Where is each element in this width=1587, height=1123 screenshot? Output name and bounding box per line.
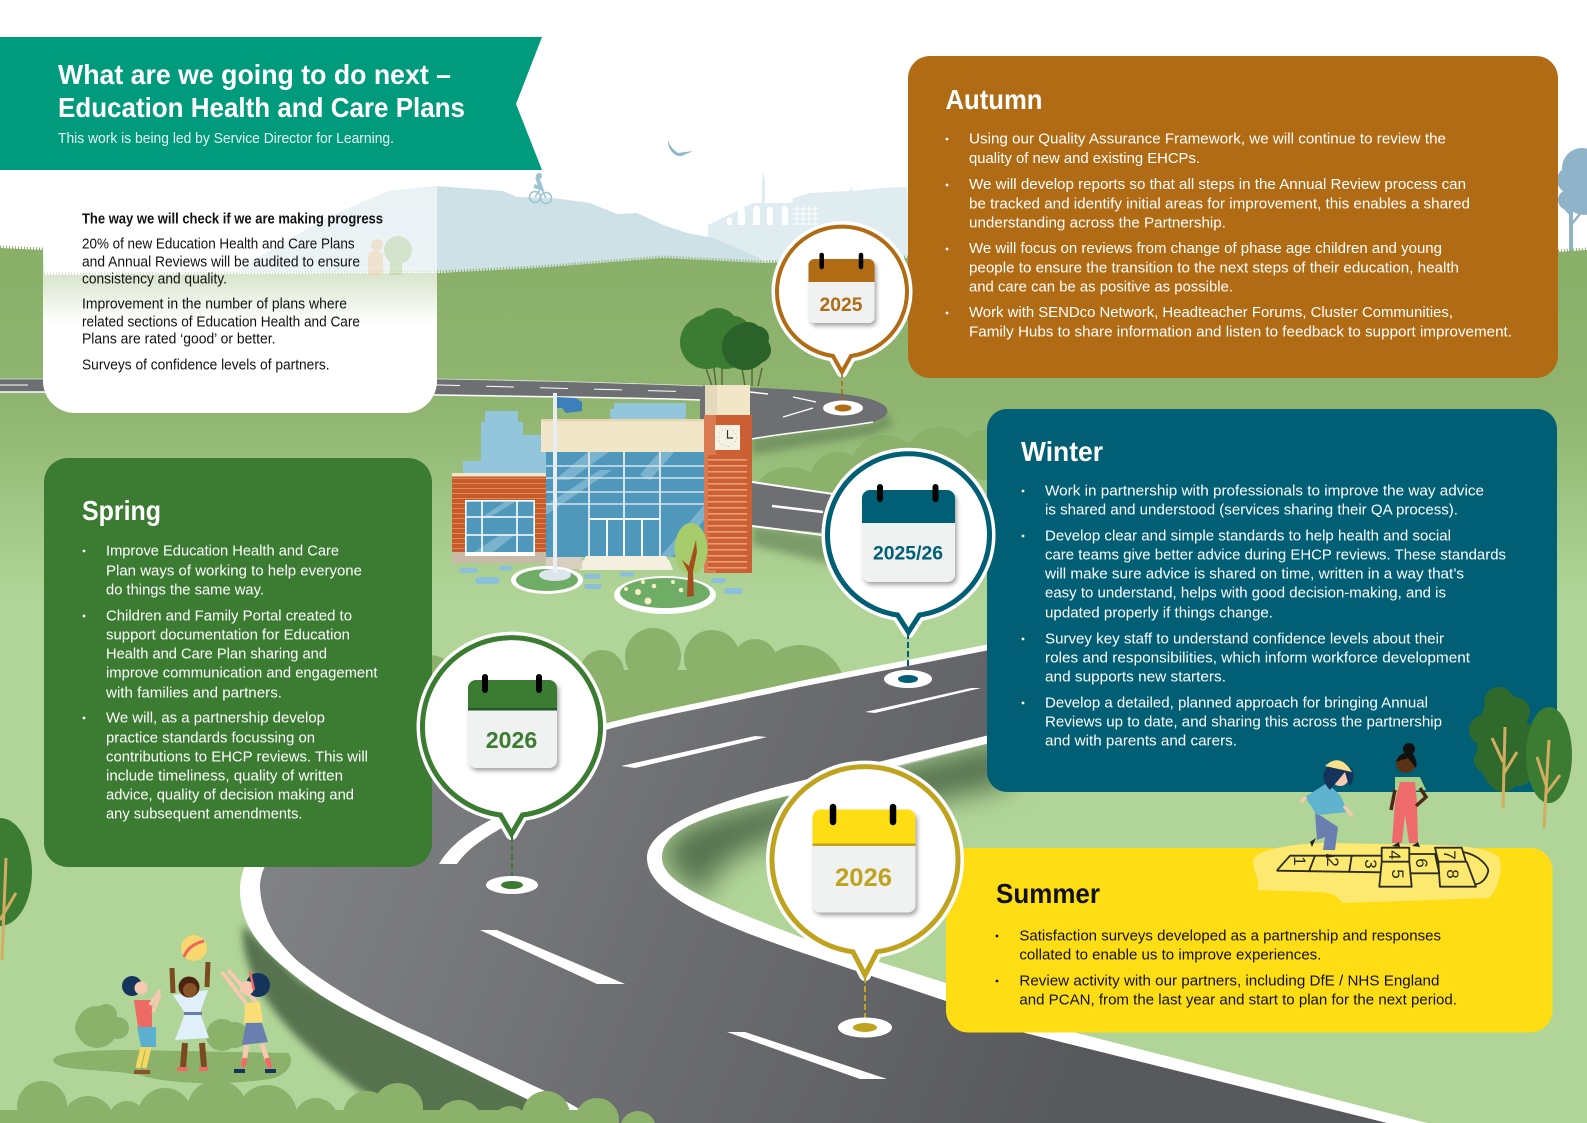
title banner — [0, 37, 542, 170]
list: Work with SENDco Network, Headteacher Forums, Cluster Communities, — [969, 305, 1453, 321]
calendar: 2025/26 — [873, 544, 943, 564]
road — [240, 640, 1450, 1123]
children: hopscotch — [1301, 743, 1426, 858]
measures: consistency and quality. — [82, 272, 227, 288]
heading: Winter — [1021, 436, 1103, 467]
ground — [53, 1050, 291, 1083]
pin: 2025 — [777, 227, 907, 416]
pin: 2026 spring — [423, 638, 601, 894]
tree left — [0, 818, 32, 960]
list: Reviews up to date, and sharing this across the partnership — [1045, 714, 1442, 730]
list — [969, 132, 1512, 340]
list: Improve Education Health and Care — [106, 544, 339, 560]
road shadow — [243, 925, 600, 1123]
list: improve communication and engagement — [106, 666, 378, 682]
clock — [715, 425, 740, 450]
list: Develop a detailed, planned approach for bringing Annual — [1045, 696, 1428, 712]
flower beds — [511, 566, 716, 614]
title banner: Education Health and Care Plans — [58, 92, 465, 123]
list: understanding across the Partnership. — [969, 216, 1226, 232]
ball — [181, 935, 207, 961]
trees right — [1469, 687, 1572, 828]
steps — [579, 556, 673, 570]
calendar — [468, 677, 557, 768]
calendar: 2026 — [835, 864, 892, 892]
list: updated properly if things change. — [1045, 606, 1273, 622]
calendar: 2025 — [820, 295, 863, 316]
panel: autumn — [908, 56, 1558, 378]
list: Review activity with our partners, including DfE / NHS England — [1019, 974, 1439, 990]
list: do things the same way. — [106, 582, 264, 598]
icon: bird — [668, 140, 693, 156]
bullets — [946, 138, 948, 314]
hopscotch numbers: 5 — [1388, 869, 1407, 879]
list: and care can be as positive as possible. — [969, 280, 1233, 296]
icon: cyclist — [530, 174, 552, 204]
list: support documentation for Education — [106, 628, 350, 644]
hopscotch numbers: 6 — [1412, 858, 1431, 868]
distant hills and skyline — [240, 172, 915, 272]
clock tower — [704, 385, 752, 573]
list — [1044, 484, 1506, 750]
bullets — [996, 935, 998, 982]
bottom bushes — [0, 1080, 656, 1123]
hopscotch numbers: 4 — [1385, 850, 1404, 860]
list: practice standards focussing on — [106, 730, 315, 746]
heading: Summer — [996, 878, 1100, 909]
list: easy to understand, helps with good decision-making, and is — [1045, 586, 1446, 602]
trees behind building — [680, 308, 771, 386]
girl centre — [172, 962, 209, 1069]
measures: Plans are rated ‘good’ or better. — [82, 332, 276, 348]
boy — [122, 976, 160, 1072]
measures: and Annual Reviews will be audited to ensure — [82, 254, 360, 270]
far road — [0, 379, 887, 445]
calendar — [808, 255, 874, 323]
pin: 2025/26 — [827, 454, 990, 688]
child hopping — [1301, 760, 1353, 858]
list: any subsequent amendments. — [106, 806, 302, 822]
list: contributions to EHCP reviews. This will — [106, 750, 368, 766]
title: What are we going to do next – — [58, 59, 451, 90]
hopscotch area — [1253, 843, 1501, 903]
glass front — [546, 450, 704, 557]
list: people to ensure the transition to the next steps of their education, health — [969, 260, 1459, 276]
panel: winter — [987, 409, 1557, 792]
bullets — [83, 550, 85, 719]
list: include timeliness, quality of written — [106, 768, 343, 784]
list: Plan ways of working to help everyone — [106, 564, 362, 580]
hopscotch numbers — [1290, 850, 1462, 879]
left wing — [452, 473, 546, 553]
hopscotch numbers: 7 — [1440, 850, 1459, 860]
measures — [82, 236, 360, 374]
measures: Improvement in the number of plans where — [82, 296, 347, 312]
panel: summer — [946, 848, 1552, 1032]
field — [0, 248, 1587, 1123]
bullets — [1022, 490, 1024, 704]
list — [1019, 928, 1457, 1008]
small tree — [674, 523, 708, 597]
list: be tracked and identify initial areas for improvement, this enables a shared — [969, 196, 1470, 212]
list: with families and partners. — [105, 686, 282, 702]
list: collated to enable us to improve experiences. — [1019, 948, 1321, 964]
middle bushes — [405, 628, 845, 745]
list: advice, quality of decision making and — [106, 788, 354, 804]
list: will make sure advice is shared on time, written in a way that’s — [1044, 566, 1464, 582]
measures: related sections of Education Health and Care — [82, 314, 360, 330]
faded figures — [368, 236, 412, 276]
list: Satisfaction surveys developed as a partnership and responses — [1019, 928, 1441, 944]
background blue shapes — [463, 403, 686, 473]
list: Develop clear and simple standards to help health and social — [1045, 528, 1451, 544]
list — [105, 544, 377, 822]
puddles — [459, 566, 743, 594]
list: roles and responsibilities, which inform workforce development — [1045, 650, 1470, 666]
list: and PCAN, from the last year and start to plan for the next period. — [1019, 992, 1457, 1008]
far road shadow — [752, 413, 893, 565]
icon: blue tree — [1557, 148, 1587, 252]
hopscotch numbers: 8 — [1443, 869, 1462, 879]
list: care teams give better advice during EHCP reviews. These standards — [1045, 548, 1506, 564]
heading: Spring — [82, 495, 161, 526]
calendar: 2026 — [486, 727, 537, 753]
panel: spring — [44, 458, 432, 867]
calendar — [812, 807, 916, 912]
calendar — [862, 487, 955, 582]
list: Health and Care Plan sharing and — [106, 646, 327, 662]
pin: 2026 summer — [772, 767, 958, 1038]
fascia — [541, 419, 704, 452]
measures: Surveys of confidence levels of partners. — [82, 358, 330, 374]
hopscotch numbers: 1 — [1290, 856, 1309, 866]
list: Survey key staff to understand confidence levels about their — [1045, 632, 1444, 648]
list: Work in partnership with professionals to improve the way advice — [1045, 484, 1484, 500]
child standing — [1391, 743, 1426, 847]
girl right — [222, 970, 276, 1071]
list: We will, as a partnership develop — [106, 710, 325, 726]
heading: The way we will check if we are making progress — [82, 212, 383, 228]
play area — [53, 935, 291, 1083]
hopscotch numbers: 3 — [1361, 859, 1380, 869]
list: Using our Quality Assurance Framework, we will continue to review the — [969, 132, 1446, 148]
island shadow — [662, 738, 1010, 905]
list: Family Hubs to share information and listen to feedback to support improvement. — [969, 324, 1512, 340]
small bushes — [75, 1004, 248, 1051]
list: We will focus on reviews from change of phase age children and young — [969, 241, 1442, 257]
road lane markings — [439, 688, 981, 1079]
list: is shared and understood (services sharing their QA process). — [1045, 502, 1458, 518]
list: quality of new and existing EHCPs. — [969, 151, 1200, 167]
heading: Autumn — [946, 84, 1042, 115]
measures: 20% of new Education Health and Care Plans — [82, 236, 355, 252]
list: and supports new starters. — [1045, 670, 1226, 686]
grass tufts — [0, 248, 1587, 275]
list: Children and Family Portal created to — [106, 608, 352, 624]
bushes behind upper road — [752, 427, 1010, 533]
upper road section — [752, 482, 900, 540]
list: We will develop reports so that all steps in the Annual Review process can — [969, 177, 1466, 193]
subtitle: This work is being led by Service Director for Learning. — [58, 131, 394, 147]
flag pole — [539, 393, 582, 581]
panel: progress checks — [43, 170, 437, 413]
hopscotch numbers: 2 — [1323, 857, 1342, 867]
building — [452, 385, 752, 614]
list: and with parents and carers. — [1045, 734, 1237, 750]
